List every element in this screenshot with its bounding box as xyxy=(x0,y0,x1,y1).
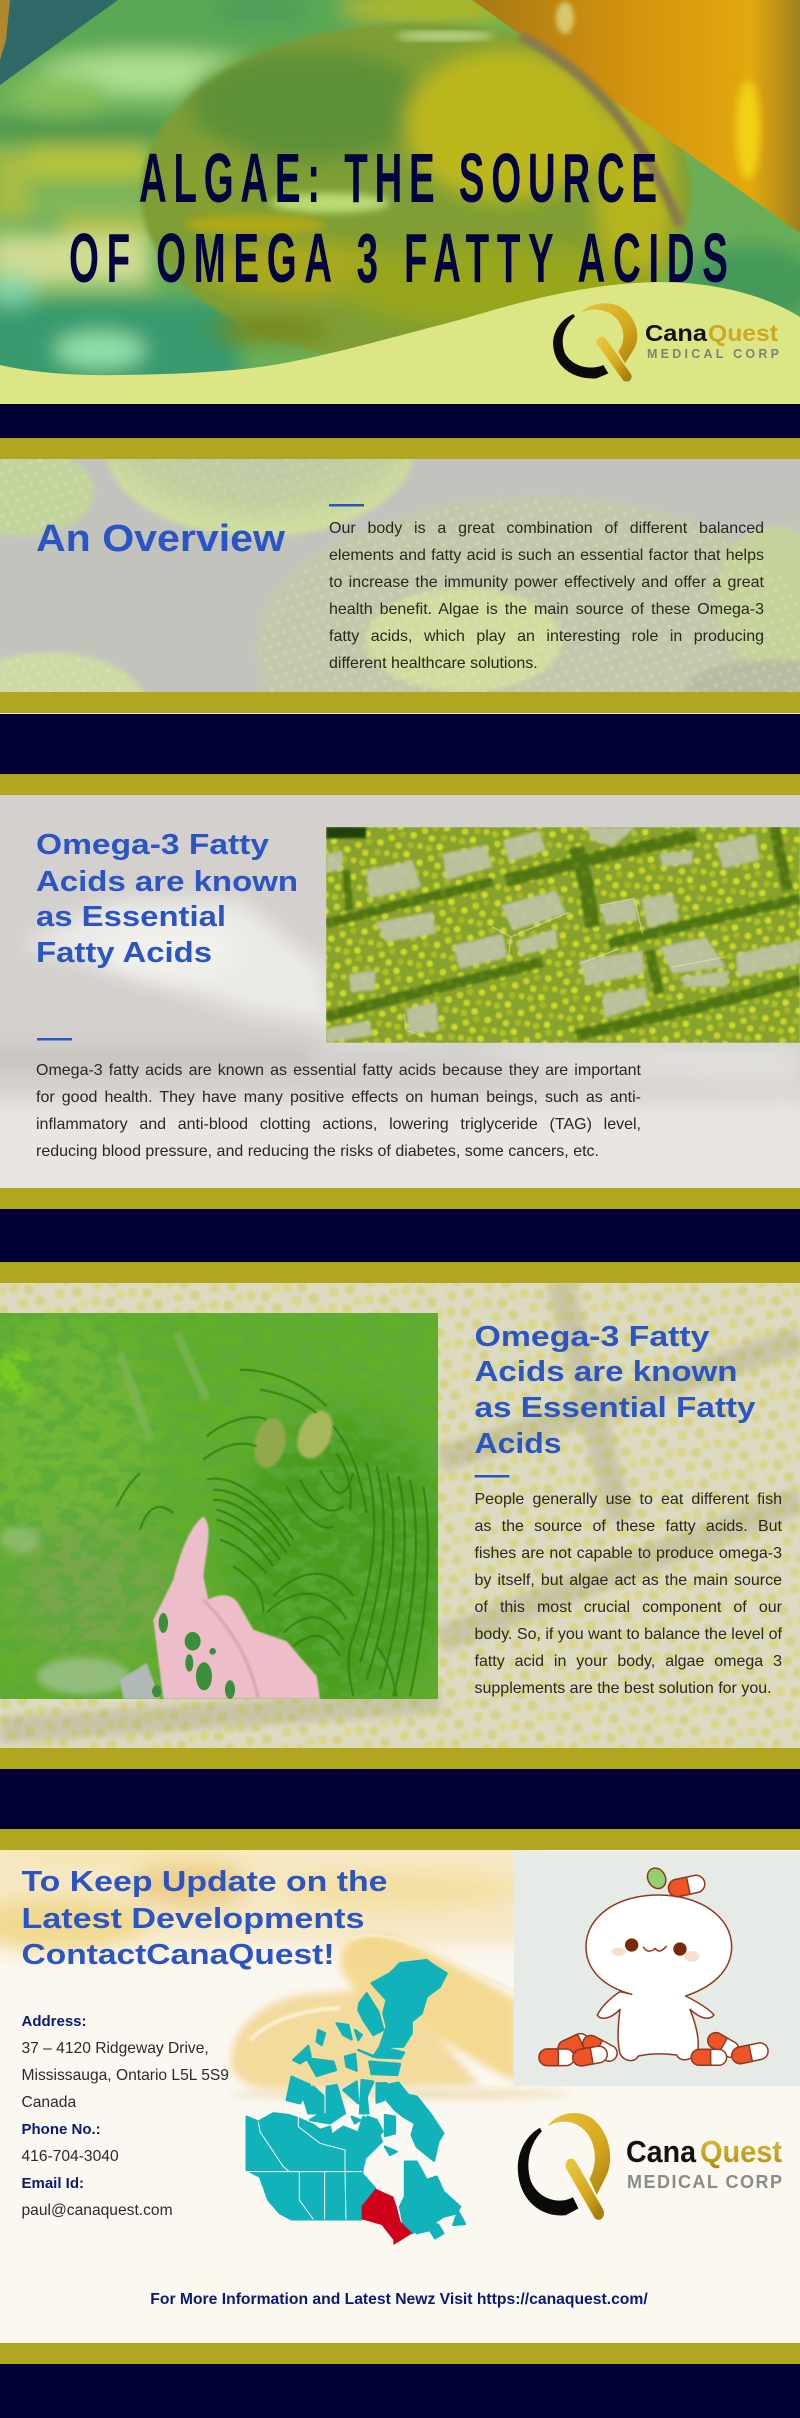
contact details xyxy=(22,2013,229,2219)
contact details: 37 – 4120 Ridgeway Drive, xyxy=(22,2040,209,2057)
top-left corner xyxy=(0,0,118,85)
logo: CanaQuest large xyxy=(518,2113,782,2216)
heading: Acids xyxy=(474,1428,562,1460)
logo: CanaQuest large: Quest xyxy=(700,2134,782,2169)
section background: pale algae cells xyxy=(0,1283,800,1748)
panel: omega-3 essential fatty acids 1 xyxy=(0,795,800,1188)
overview background: diatom cells xyxy=(0,357,800,804)
title: ALGAE: THE SOURCE xyxy=(139,139,657,217)
overview text: to increase the immunity power effectively and offer a great xyxy=(329,574,764,591)
section text: by itself, but algae act as the main source xyxy=(474,1572,782,1589)
contact details: 416-704-3040 xyxy=(22,2148,119,2165)
softgel capsules xyxy=(231,1934,516,2090)
contact details: Email Id: xyxy=(22,2175,84,2192)
heading: Fatty Acids xyxy=(36,937,212,969)
heading: ContactCanaQuest! xyxy=(22,1939,334,1971)
dash xyxy=(37,1038,72,1040)
panel: hero header xyxy=(0,0,800,404)
map: Canada with Ontario highlighted xyxy=(247,1960,465,2245)
logo: CanaQuest large: MEDICAL CORP xyxy=(627,2172,782,2192)
heading: as Essential Fatty xyxy=(474,1392,756,1424)
heading xyxy=(36,829,298,969)
heading: Latest Developments xyxy=(22,1903,364,1935)
light wave xyxy=(0,282,800,404)
dash xyxy=(329,504,364,506)
pale scum and water xyxy=(37,1658,130,1695)
mascot figure with pills xyxy=(539,1865,770,2067)
section text: for good health. They have many positive effects on human beings, such as anti- xyxy=(36,1089,641,1106)
contact details: Mississauga, Ontario L5L 5S9 xyxy=(22,2067,229,2084)
footer link line: For More Information and Latest Newz Visit https://canaquest.com/ xyxy=(150,2290,648,2308)
heading: an overview: An Overview xyxy=(36,518,285,560)
section text: body. So, if you want to balance the level of xyxy=(474,1626,782,1643)
section text: People generally use to eat different fish xyxy=(474,1491,782,1508)
section text: supplements are the best solution for you. xyxy=(474,1680,772,1697)
panel: contact xyxy=(0,1850,800,2343)
panel: an overview xyxy=(0,459,800,692)
section text: inflammatory and anti-blood clotting actions, lowering triglyceride (TAG) level, xyxy=(36,1116,641,1133)
photo: green algal bloom xyxy=(0,1310,450,1710)
section text: Omega-3 fatty acids are known as essential fatty acids because they are important xyxy=(36,1062,641,1079)
overview text: fatty acids, which play an interesting role in producing xyxy=(329,628,764,645)
title: OF OMEGA 3 FATTY ACIDS xyxy=(69,219,728,297)
overview text: elements and fatty acid is such an essential factor that helps xyxy=(329,547,764,564)
photo: algae cells micrograph xyxy=(326,827,800,1043)
contact background: blurred softgels xyxy=(0,1830,800,2343)
panel: omega-3 essential fatty acids 2 xyxy=(0,1283,800,1748)
large green capsule xyxy=(141,23,691,363)
logo: CanaQuest hero: Cana xyxy=(645,320,707,346)
contact details: Canada xyxy=(22,2094,76,2111)
overview text xyxy=(329,520,764,672)
contact details: paul@canaquest.com xyxy=(22,2202,173,2219)
pink exposed area xyxy=(153,1516,320,1699)
section text: of this most crucial component of our xyxy=(474,1599,782,1616)
heading xyxy=(474,1321,756,1460)
title xyxy=(69,139,728,297)
logo: CanaQuest hero: Quest xyxy=(708,320,778,346)
overview text: health benefit. Algae is the main source of these Omega-3 xyxy=(329,601,764,618)
logo: CanaQuest hero: MEDICAL CORP xyxy=(647,347,779,361)
dash xyxy=(474,1475,510,1478)
heading xyxy=(22,1866,388,1971)
contact details: Address: xyxy=(22,2013,87,2030)
heading: Omega-3 Fatty xyxy=(36,829,269,861)
logo: CanaQuest large: Cana xyxy=(626,2134,697,2169)
overview text: different healthcare solutions. xyxy=(329,655,538,672)
logo: CanaQuest hero xyxy=(553,303,779,378)
heading: Acids are known xyxy=(36,866,298,898)
heading: as Essential xyxy=(36,901,226,933)
section text: fishes are not capable to produce omega-3 xyxy=(474,1545,782,1562)
heading: Acids are known xyxy=(474,1356,738,1388)
section text: fatty acid in your body, algae omega 3 xyxy=(474,1653,782,1670)
section text xyxy=(36,1062,641,1160)
heading: Omega-3 Fatty xyxy=(474,1321,710,1353)
hero background: softgel capsules photo xyxy=(0,0,800,404)
section background: blurred blister pack xyxy=(0,795,800,1200)
panel: mascot xyxy=(514,1851,800,2086)
section text: as the source of these fatty acids. But xyxy=(474,1518,782,1535)
heading: To Keep Update on the xyxy=(22,1866,388,1898)
contact details: Phone No.: xyxy=(22,2121,101,2138)
section text xyxy=(474,1491,782,1697)
section text: reducing blood pressure, and reducing the risks of diabetes, some cancers, etc. xyxy=(36,1143,599,1160)
top-right orange capsule xyxy=(472,0,800,233)
overview text: Our body is a great combination of different balanced xyxy=(329,520,764,537)
